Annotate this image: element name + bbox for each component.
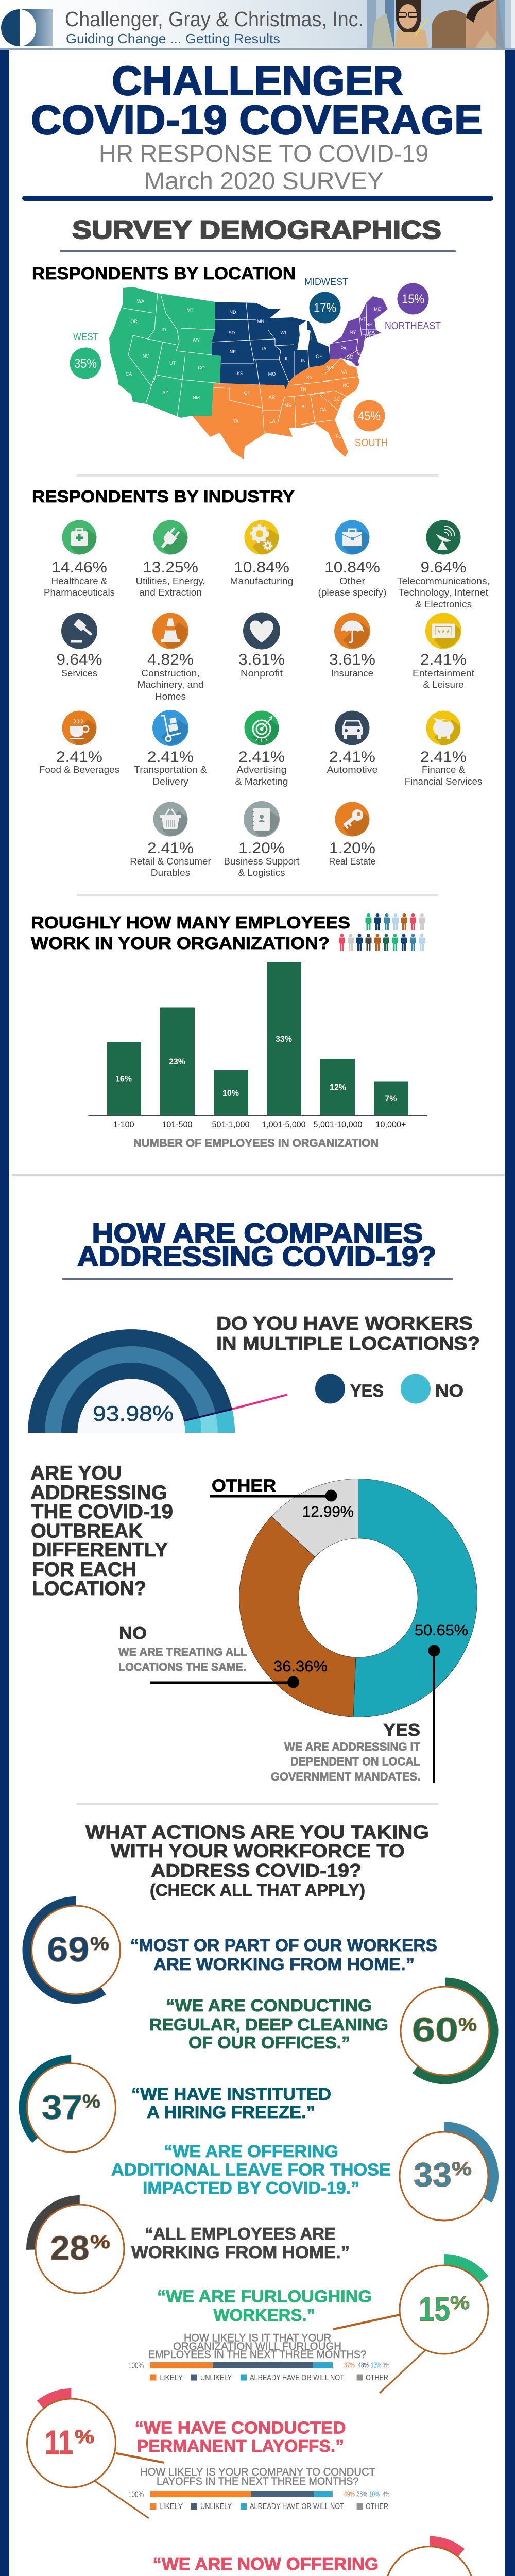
text: services [57,651,102,679]
text: construction: Construction, [141,668,200,679]
text: telecom: & Electronics [415,599,472,609]
callout: yes 50.65%: GOVERNMENT MANDATES. [271,1770,420,1783]
text: transport: Transportation & [134,765,207,775]
heading: employees: ROUGHLY HOW MANY EMPLOYEES [31,913,350,932]
stat: 69%: % [90,1933,109,1954]
map region: south: TX [233,419,239,424]
heading: what actions: WHAT ACTIONS ARE YOU TAKING [85,1822,429,1842]
icon: construction cone [152,613,188,649]
text: automotive [327,749,378,775]
heading: how are companies addressing [77,1218,436,1272]
map region: south: GA [319,407,327,412]
stat: 60% [149,1982,494,2080]
map region: midwest: IL [285,356,289,361]
text: finance [405,749,482,787]
icon: other briefcase [335,520,370,554]
heading: respondents by location: RESPONDENTS BY LOCATION [32,264,296,283]
map region: south: TN [300,387,306,392]
icon: food cup [62,711,97,745]
text: food [39,749,119,775]
header company name: Challenger, Gray & Christmas, Inc. [65,7,364,31]
map region: northeast: CT [365,334,371,340]
text: nonprofit: 3.61% [238,651,285,668]
text: other: (please specify) [318,587,386,598]
text: telecom: Technology, Internet [399,587,488,598]
chart: rainbow gauge 93.98% [28,1329,287,1433]
map region: west: CA [126,371,132,377]
stat: 33%: ADDITIONAL LEAVE FOR THOSE [111,2160,391,2179]
icon: entertainment ticket: ★★★ [437,629,450,635]
icon: nonprofit heart [243,612,280,649]
icon: people row 1 [366,913,425,930]
icon: utilities plug [153,520,187,554]
text: insurance: 3.61% [329,651,375,668]
chart: layoff likelihood: HOW LIKELY IS YOUR COMPANY TO CONDUCT [140,2466,375,2478]
stat: 60%: “WE ARE CONDUCTING [166,1996,372,2015]
chart: furlough likelihood [128,2332,389,2382]
stat: 37%: A HIRING FREEZE.” [147,2103,315,2122]
question: addressing differently: ARE YOU [30,1462,122,1484]
callout: west: 35% [74,357,97,371]
map region: northeast: VT [360,317,366,322]
text: utilities: 13.25% [143,559,198,576]
bar chart: employees: 101-500 [162,1120,193,1129]
map region: northeast: MA [368,330,375,335]
callout: midwest [304,277,348,324]
stat: 37% [3,2039,331,2176]
chart: furlough likelihood: 48% [358,2361,369,2370]
text: finance: Financial Services [405,776,482,787]
callout: yes 50.65%: DEPENDENT ON LOCAL [290,1755,420,1768]
stat: 33%: IMPACTED BY COVID-19.” [143,2178,359,2197]
callout: yes 50.65% [271,1622,468,1783]
text: finance: 2.41% [420,749,467,766]
map region: west: OR [130,319,138,324]
question: addressing differently [30,1462,173,1600]
text: manufacturing: Manufacturing [230,576,294,586]
heading: how are companies addressing: ADDRESSING COVID-19? [77,1241,436,1272]
chart: layoff likelihood: LAYOFFS IN THE NEXT THREE MONTHS? [157,2476,358,2487]
stat: 11% layoffs: PERMANENT LAYOFFS.” [137,2436,344,2455]
chart: furlough likelihood: ORGANIZATION WILL FURLOUGH [173,2341,341,2352]
callout: no 36.36%: WE ARE TREATING ALL [118,1646,247,1658]
stat: 15% furloughing: 15 [419,2290,450,2328]
map region: west [109,287,221,418]
map region: south: MS [284,403,291,408]
text: real estate: 1.20% [329,840,375,857]
text: other [318,559,386,598]
map region: northeast: DC [346,354,353,360]
map region: west: NV [143,353,149,359]
text: nonprofit: Nonprofit [241,668,283,679]
text: other: 10.84% [324,559,380,576]
map region: west: AZ [162,390,168,395]
header tagline: Guiding Change ... Getting Results [66,31,280,46]
heading: what actions [85,1822,429,1900]
text: construction: Homes [155,691,186,702]
bar chart: employees: 10,000+ [376,1120,406,1129]
text: construction: Machinery, and [137,680,204,690]
stat: 60%: OF OUR OFFICES.” [188,2033,350,2052]
stat: 33%: % [452,2158,472,2179]
text: healthcare: Pharmaceuticals [44,587,115,598]
chart: layoff likelihood: UNLIKELY [200,2502,232,2511]
stat: 37%: “WE HAVE INSTITUTED [131,2084,331,2104]
stat: 33%: “WE ARE OFFERING [164,2142,338,2161]
stat: 69%: 69 [47,1930,90,1969]
text: transport [134,749,207,787]
question: addressing differently: OUTBREAK [31,1520,143,1543]
question: addressing differently: FOR EACH [32,1558,136,1581]
map region: midwest: KS [237,371,243,376]
text: services: Services [61,668,97,679]
callout: yes 50.65%: YES [383,1720,420,1739]
text: telecom: 9.64% [420,559,467,576]
chart: furlough likelihood: 3% [383,2361,389,2370]
callout: no 36.36%: NO [119,1623,147,1642]
map region: west: NM [193,395,200,400]
map region: west: WY [193,337,200,343]
title: COVID-19 COVERAGE [31,97,483,143]
question: addressing differently: DIFFERENTLY [32,1539,168,1561]
chart: furlough likelihood: EMPLOYEES IN THE NEXT THREE MONTHS? [148,2349,366,2361]
text: healthcare [44,559,115,598]
icon: transport hand truck [152,710,188,746]
text: finance: Finance & [422,765,465,775]
icon: insurance umbrella [334,613,370,649]
chart: furlough likelihood: OTHER [366,2374,388,2382]
map region: northeast [330,296,388,366]
text: automotive: Automotive [327,765,378,775]
question: addressing differently: ADDRESSING [30,1482,167,1504]
map region: south: VA [341,369,347,375]
callout: west [70,332,101,379]
callout: other 12.99% [210,1476,354,1520]
bar chart: employees: 33% [276,1034,292,1044]
stat: 15% furloughing [157,2260,494,2393]
donut chart: addressing differently [239,1479,477,1717]
text: advertising: 2.41% [238,749,285,766]
header logo [1,9,53,46]
stat: 60%: REGULAR, DEEP CLEANING [149,2015,388,2034]
chart: rainbow gauge 93.98%: 93.98% [93,1401,174,1426]
stat: 28%: 28 [50,2229,90,2267]
bar chart: employees: 1,001-5,000 [262,1120,306,1129]
chart: furlough likelihood: 100% [128,2361,144,2370]
map region: midwest: WI [280,330,286,335]
text: advertising: & Marketing [235,776,288,787]
question: addressing differently: THE COVID-19 [31,1501,173,1523]
heading: what actions: (CHECK ALL THAT APPLY) [150,1880,365,1900]
map region: northeast: ME [374,307,381,312]
header photo [367,0,515,50]
map region: south: WV [327,365,334,370]
stat: 28%: % [90,2231,110,2252]
heading: multiple locations question: DO YOU HAVE WORKERS [216,1313,473,1334]
icon: real estate key [335,802,370,837]
map region: west: MT [186,308,194,313]
map region: south: NC [343,383,350,388]
header banner [0,0,515,50]
stat: 11% layoffs: “WE HAVE CONDUCTED [135,2418,346,2437]
stat: 60%: % [458,2014,477,2035]
text: food: Food & Beverages [39,765,119,775]
text: business support: & Logistics [238,868,285,878]
panel: industries grid [39,520,490,878]
chart: furlough likelihood: 37% [344,2361,355,2370]
bar chart: employees: 10% [222,1088,239,1098]
text: construction [137,651,204,702]
callout: other 12.99%: 12.99% [302,1504,354,1520]
callout: other 12.99%: OTHER [212,1476,276,1496]
heading: employees: WORK IN YOUR ORGANIZATION? [31,934,330,953]
text: manufacturing [230,559,294,586]
subtitle: HR RESPONSE TO COVID-19 [99,140,428,167]
map region: midwest: OH [316,354,323,359]
map region: south: KY [306,375,313,380]
text: services: 9.64% [57,651,102,668]
callout: south: 45% [358,409,381,423]
callout: midwest: 17% [314,301,336,315]
map region: midwest [212,302,330,389]
text: entertainment: Entertainment [413,668,474,679]
map region: west: UT [169,361,176,366]
chart: layoff likelihood: OTHER [366,2502,388,2511]
text: entertainment [413,651,474,690]
callout: west: WEST [73,332,98,343]
map region: midwest: MN [257,319,264,324]
title: CHALLENGER [112,58,403,104]
stat: 15% furloughing: “WE ARE FURLOUGHING [157,2287,372,2306]
callout: northeast [385,283,441,332]
callout: northeast: 15% [402,292,424,307]
chart: layoff likelihood: LIKELY [159,2502,183,2511]
map region: south: FL [336,434,341,439]
callout: no 36.36% [118,1623,328,1688]
text: entertainment: 2.41% [420,651,467,668]
legend: yes / no: YES [350,1381,384,1401]
legend: yes / no: NO [435,1381,464,1401]
map region: northeast: NH [366,322,373,327]
us map [109,287,388,459]
stat: 37%: % [82,2091,100,2112]
chart: furlough likelihood: UNLIKELY [200,2374,232,2382]
heading: multiple locations question [216,1313,480,1354]
stat: 11% paid sick leave [152,2541,479,2576]
map region: west: WA [137,299,144,304]
heading: what actions: WITH YOUR WORKFORCE TO [111,1840,405,1861]
map region: south: AL [301,404,307,409]
text: transport: Delivery [152,776,188,787]
stat: 69% [8,1882,437,2018]
icon: services gavel [61,613,97,649]
text: telecom [397,559,490,609]
icon: healthcare [62,520,97,554]
map region: midwest: ND [230,310,236,315]
map region: northeast: PA [340,346,347,351]
stat: 11% layoffs: 11 [45,2424,73,2462]
bar chart: employees: 7% [385,1094,397,1104]
text: construction: 4.82% [147,651,194,668]
text: manufacturing: 10.84% [234,559,289,576]
text: entertainment: & Leisure [423,680,464,690]
map region: midwest: IN [301,358,306,363]
text: retail: Retail & Consumer [130,856,211,867]
callout: midwest: MIDWEST [304,277,348,287]
map region: midwest: IA [262,346,266,351]
icon: entertainment ticket [425,613,461,649]
bar chart: employees: 12% [330,1082,346,1092]
text: utilities: Utilities, Energy, [136,576,205,586]
map region: midwest: MI [306,335,312,341]
legend: yes / no [315,1374,464,1403]
heading: survey demographics: SURVEY DEMOGRAPHICS [72,215,441,244]
icon: people row 2 [339,934,425,951]
map region: northeast: NY [350,330,356,335]
text: telecom: Telecommunications, [397,576,490,586]
map region: northeast: NJ [356,352,363,357]
chart: layoff likelihood: 38% [357,2489,367,2499]
bar chart: employees: 501-1,000 [212,1120,249,1129]
text: healthcare: 14.46% [52,559,107,576]
map region: midwest: NE [230,349,236,354]
text: real estate: Real Estate [329,856,376,867]
heading: respondents by industry: RESPONDENTS BY INDUSTRY [32,487,295,506]
page border left [0,50,9,2576]
map region: midwest: SD [229,330,235,335]
text: retail: 2.41% [147,840,194,857]
stat: 11% layoffs [2,2374,346,2518]
map region: west: CO [198,365,205,370]
stat: 15% furloughing: WORKERS.” [213,2306,315,2325]
stat: 15% furloughing: % [450,2292,470,2313]
icon: telecom satellite [426,520,460,554]
callout: south: SOUTH [355,437,388,449]
text: food: 2.41% [56,749,102,766]
bar chart: employees: 23% [169,1057,185,1066]
bar chart: employees: 5,001-10,000 [313,1120,363,1129]
map region: south: SC [334,397,340,402]
question: addressing differently: LOCATION? [32,1578,146,1600]
callout: yes 50.65%: WE ARE ADDRESSING IT [284,1740,421,1753]
map region: west: ID [162,327,166,332]
stat: 11% layoffs: % [75,2426,94,2447]
chart: furlough likelihood: LIKELY [159,2374,183,2382]
text: business support: 1.20% [238,840,285,857]
text: advertising: Advertising [237,765,286,775]
text: automotive: 2.41% [329,749,375,766]
text: nonprofit [238,651,285,679]
stat: 37%: 37 [42,2088,82,2126]
text: utilities [136,559,205,598]
text: business support [224,840,300,878]
text: healthcare: Healthcare & [52,576,107,586]
chart: layoff likelihood: 4% [383,2489,389,2499]
chart: layoff likelihood: 10% [369,2489,380,2499]
text: utilities: and Extraction [139,587,202,598]
map region: south: OK [244,391,251,396]
stat: 28%: “ALL EMPLOYEES ARE [145,2224,336,2243]
bar chart: employees: 16% [115,1074,132,1084]
chart: layoff likelihood: 100% [128,2489,144,2499]
text: insurance [329,651,375,679]
callout: yes 50.65%: 50.65% [415,1622,468,1639]
text: advertising [235,749,288,787]
chart: furlough likelihood: 12% [371,2361,381,2370]
text: business support: Business Support [224,856,300,867]
stat: 69%: “MOST OR PART OF OUR WORKERS [130,1936,437,1955]
chart: furlough likelihood: HOW LIKELY IS IT THAT YOUR [184,2332,331,2344]
stat: 33%: 33 [414,2156,452,2194]
heading: employees [31,913,350,953]
page border right [505,50,515,2576]
callout: no 36.36%: LOCATIONS THE SAME. [118,1660,246,1673]
map region: midwest: MO [268,371,276,377]
chart: layoff likelihood [128,2466,389,2511]
chart: layoff likelihood: 49% [344,2489,355,2499]
bar chart: employees: NUMBER OF EMPLOYEES IN ORGANIZATION [133,1137,379,1149]
bar chart: employees [89,962,427,1149]
subtitle: March 2020 SURVEY [144,167,384,194]
callout: northeast: NORTHEAST [385,320,441,332]
text: retail [130,840,211,878]
stat: 28%: WORKING FROM HOME.” [131,2243,350,2262]
callout: south [353,400,388,449]
stat: 28% [30,2199,350,2299]
title [31,58,483,143]
icon: finance piggy bank [426,711,460,745]
text: insurance: Insurance [331,668,373,679]
icon: advertising target [244,711,279,745]
icon: automotive car [335,711,370,745]
callout: no 36.36%: 36.36% [273,1658,328,1675]
text: retail: Durables [151,868,190,878]
text: real estate [329,840,376,867]
stat: 69%: ARE WORKING FROM HOME.” [153,1955,415,1974]
heading: how are companies addressing: HOW ARE COMPANIES [92,1218,423,1249]
bar chart: employees: 1-100 [113,1120,134,1129]
chart: layoff likelihood: ALREADY HAVE OR WILL NOT [250,2502,344,2511]
map region: south: AR [269,395,276,400]
icon: business support address book [244,801,280,837]
map region: south [192,358,359,459]
stat: 60%: 60 [412,2010,458,2048]
stat: 33% [111,2127,493,2226]
icon: retail basket [153,802,187,837]
chart: furlough likelihood: ALREADY HAVE OR WILL NOT [250,2374,344,2382]
heading: what actions: ADDRESS COVID-19? [151,1860,362,1881]
heading: multiple locations question: IN MULTIPLE LOCATIONS? [216,1333,480,1354]
text: transport: 2.41% [147,749,194,766]
text: other: Other [339,576,365,586]
subtitle [99,140,428,194]
icon: manufacturing gears [244,520,279,554]
map region: south: LA [269,419,276,424]
stat: 11% paid sick leave: “WE ARE NOW OFFERING [152,2554,379,2573]
